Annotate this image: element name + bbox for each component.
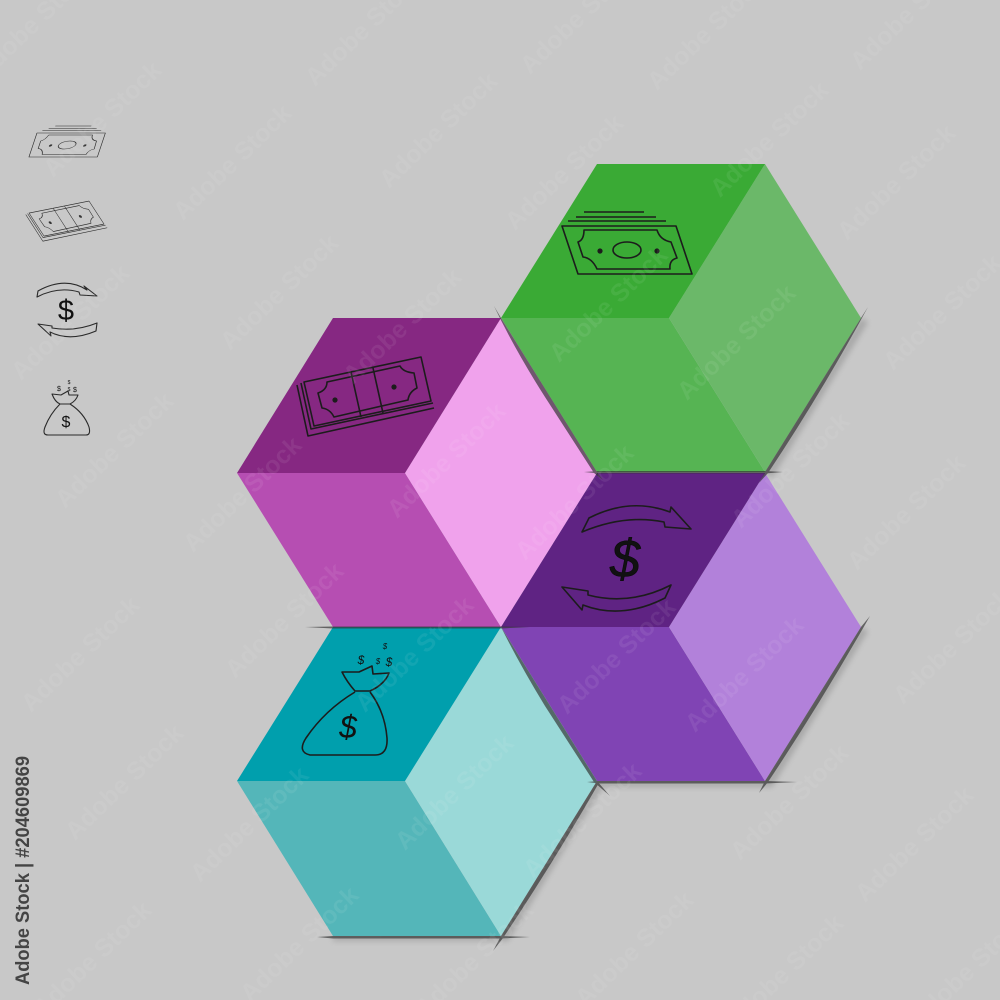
- icon: banknote on green cube: [562, 212, 692, 274]
- icon column: small money bag: $: [68, 380, 71, 386]
- watermarks: Adobe Stock: [220, 557, 349, 683]
- icon column: small money bag: $: [68, 387, 71, 393]
- cube: green: [501, 164, 861, 472]
- icon column: small money bag: [44, 380, 90, 435]
- watermarks: Adobe Stock: [38, 56, 167, 182]
- icon: money bag on teal cube: $: [375, 657, 381, 666]
- watermarks: Adobe Stock: [374, 67, 503, 193]
- stock id label: Adobe Stock | #204609869: [13, 756, 34, 985]
- watermarks: Adobe Stock: [832, 119, 961, 245]
- icon: banknote stack on magenta cube: [297, 357, 434, 436]
- watermarks: Adobe Stock: [390, 729, 519, 855]
- icon column: small banknote stack: [20, 200, 113, 242]
- icon: money bag on teal cube: $: [382, 642, 388, 651]
- watermarks: Adobe Stock: [6, 259, 135, 385]
- icon: money bag on teal cube: $: [338, 709, 358, 745]
- watermarks: Adobe Stock: [350, 591, 479, 717]
- icon: dollar exchange arrows on purple cube: [562, 506, 691, 611]
- icon column: small money bag: $: [62, 414, 71, 431]
- watermarks: Adobe Stock: [60, 719, 189, 845]
- icon: dollar exchange arrows on purple cube: $: [609, 529, 641, 589]
- watermarks: Adobe Stock: [680, 611, 809, 737]
- watermarks: Adobe Stock: [842, 449, 971, 575]
- icon: money bag on teal cube: $: [357, 653, 365, 667]
- watermarks: Adobe Stock: [215, 229, 344, 355]
- icon column: small dollar exchange: $: [58, 295, 74, 327]
- watermarks: Adobe Stock: [850, 781, 979, 907]
- icon column: small money bag: $: [57, 386, 61, 393]
- watermarks: Adobe Stock: [518, 757, 647, 883]
- watermarks: Adobe Stock: [16, 591, 145, 717]
- watermarks: Adobe Stock: [382, 397, 511, 523]
- watermarks: Adobe Stock: [510, 439, 639, 565]
- watermarks: Adobe Stock: [725, 739, 854, 865]
- watermarks: Adobe Stock: [726, 407, 855, 533]
- watermarks: Adobe Stock: [552, 593, 681, 719]
- icon column: small banknote: [19, 126, 120, 157]
- icon: money bag on teal cube: $: [385, 655, 393, 669]
- watermarks: Adobe Stock: [672, 279, 801, 405]
- icon: money bag on teal cube: [302, 642, 393, 755]
- watermarks: Adobe Stock: [705, 76, 834, 202]
- soft cube shadows: [333, 318, 868, 941]
- cube: purple: [501, 473, 861, 781]
- icon column: small money bag: $: [73, 387, 77, 394]
- cube: teal: [237, 627, 597, 936]
- watermarks: Adobe Stock: [185, 761, 314, 887]
- tapered edge shadows and corner ticks: [305, 306, 870, 951]
- watermarks: Adobe Stock: [544, 241, 673, 367]
- watermarks: Adobe Stock: [50, 387, 179, 513]
- watermarks: Adobe Stock: [178, 431, 307, 557]
- icon column: small dollar exchange: [37, 283, 97, 337]
- cube: magenta: [237, 318, 597, 627]
- watermarks: Adobe Stock: [500, 109, 629, 235]
- watermarks: Adobe Stock: [168, 99, 297, 225]
- watermarks: Adobe Stock: [338, 263, 467, 389]
